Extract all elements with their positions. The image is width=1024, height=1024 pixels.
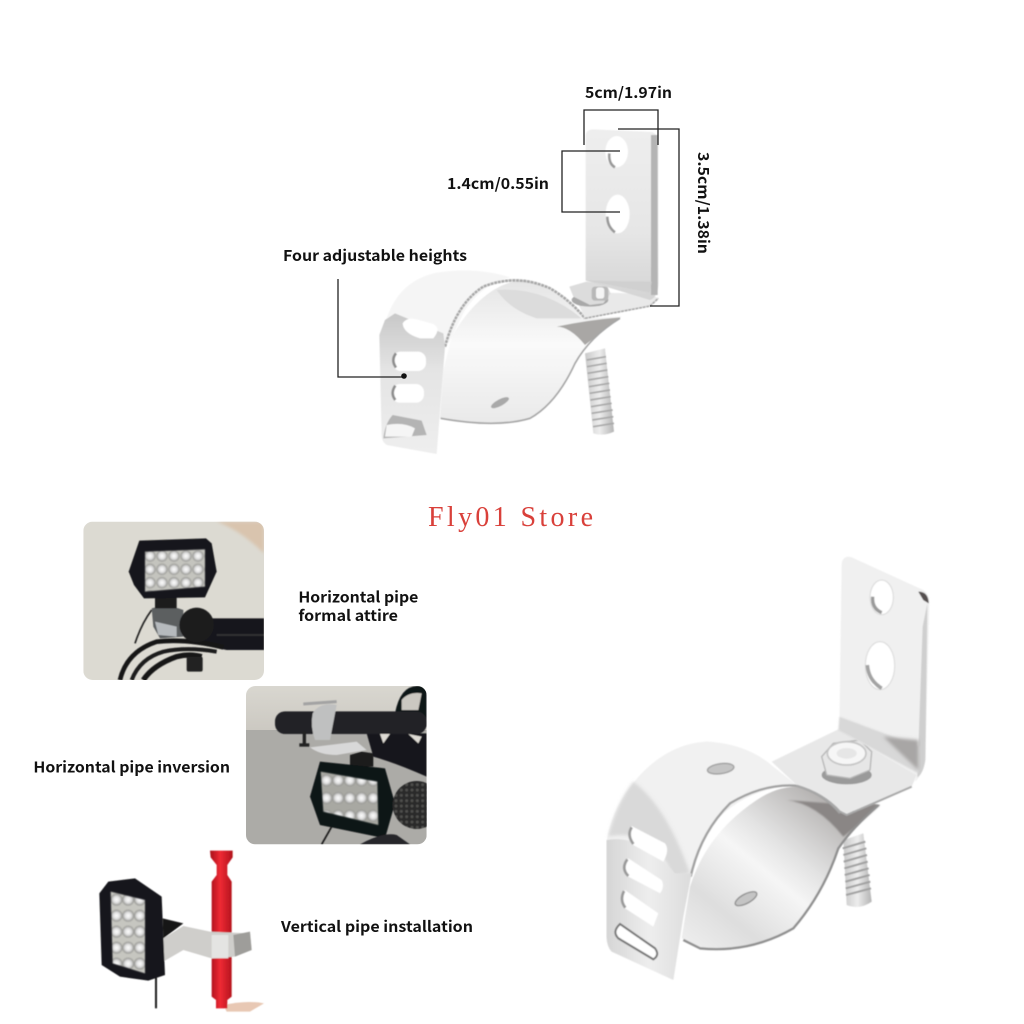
mount stem	[155, 597, 177, 608]
height label: 3.5cm/1.38in	[693, 152, 714, 254]
caption second line: formal attire	[298, 605, 398, 626]
upright plate	[838, 557, 929, 782]
tail lamp	[392, 780, 427, 830]
upper strap edge	[691, 785, 840, 877]
caption: vertical pipe installation: Vertical pipe installation	[280, 916, 473, 937]
width label: 5cm/1.97in	[585, 82, 672, 103]
callout leader line	[338, 279, 404, 377]
flange	[772, 729, 917, 815]
flange edge	[797, 786, 912, 815]
large bracket product photo	[607, 557, 929, 980]
bolt head	[822, 740, 872, 784]
upper strap edge	[445, 280, 585, 347]
clamp	[312, 704, 337, 740]
mount plate	[310, 742, 367, 755]
threaded bolt	[585, 348, 614, 435]
lower band shadow	[497, 290, 582, 318]
width bracket line	[584, 110, 658, 145]
bolt	[303, 732, 306, 745]
photo: horizontal pipe inversion	[246, 686, 441, 844]
callout dot	[401, 373, 407, 379]
lamp LEDs	[111, 892, 145, 973]
hole spacing label: 1.4cm/0.55in	[447, 173, 549, 194]
bolt head	[569, 282, 611, 307]
upper dark frame	[395, 686, 427, 727]
lamp LEDs	[321, 772, 378, 825]
installation photos and captions	[33, 522, 473, 1012]
lamp body	[310, 762, 395, 838]
slotted tab	[607, 826, 692, 980]
hole spacing line	[562, 151, 620, 212]
lower band	[440, 280, 622, 423]
threaded bolt	[843, 833, 872, 907]
flange edge	[585, 298, 658, 318]
lamp LEDs	[145, 549, 205, 592]
lower band	[682, 787, 880, 949]
upper strap	[380, 271, 510, 343]
photo: vertical pipe installation	[99, 851, 264, 1012]
lower band dark fold	[557, 317, 621, 345]
lower band dark fold	[787, 800, 880, 837]
caption: horizontal pipe formal attire: Horizontal pipe	[298, 587, 419, 608]
cable bundle	[120, 641, 223, 680]
upper strap shade	[608, 782, 690, 877]
photo: horizontal pipe formal attire	[83, 522, 264, 680]
upper slot	[707, 762, 735, 775]
cable	[153, 977, 159, 1008]
upright plate	[586, 129, 658, 300]
pipe	[275, 711, 427, 734]
handlebar	[203, 618, 264, 651]
finger	[223, 1002, 264, 1012]
clamp bracket	[163, 926, 252, 962]
height bracket line	[618, 129, 679, 306]
lamp cable	[322, 827, 332, 844]
lower band edge	[683, 805, 878, 949]
upper strap	[607, 742, 797, 873]
lamp body	[129, 538, 217, 598]
store watermark: Fly01 Store	[428, 502, 593, 533]
top flange	[572, 292, 658, 318]
red pipe	[210, 851, 233, 1008]
callout label: Four adjustable heights	[283, 245, 467, 266]
lamp body	[99, 878, 165, 981]
hole spacing dimension: 1.4cm/0.55in	[447, 151, 620, 212]
control knob	[179, 608, 214, 642]
clamp	[152, 606, 183, 638]
width dimension: 5cm/1.97in	[584, 82, 672, 145]
small bracket with dimensions	[379, 129, 658, 454]
lower mounting slot	[490, 395, 510, 410]
lower band edge	[441, 318, 620, 423]
height dimension: 3.5cm/1.38in	[618, 129, 714, 306]
slotted tab	[379, 313, 445, 454]
caption: horizontal pipe inversion: Horizontal pipe inversion	[33, 757, 230, 778]
lower slot	[733, 889, 759, 908]
callout: four adjustable heights	[283, 245, 467, 379]
